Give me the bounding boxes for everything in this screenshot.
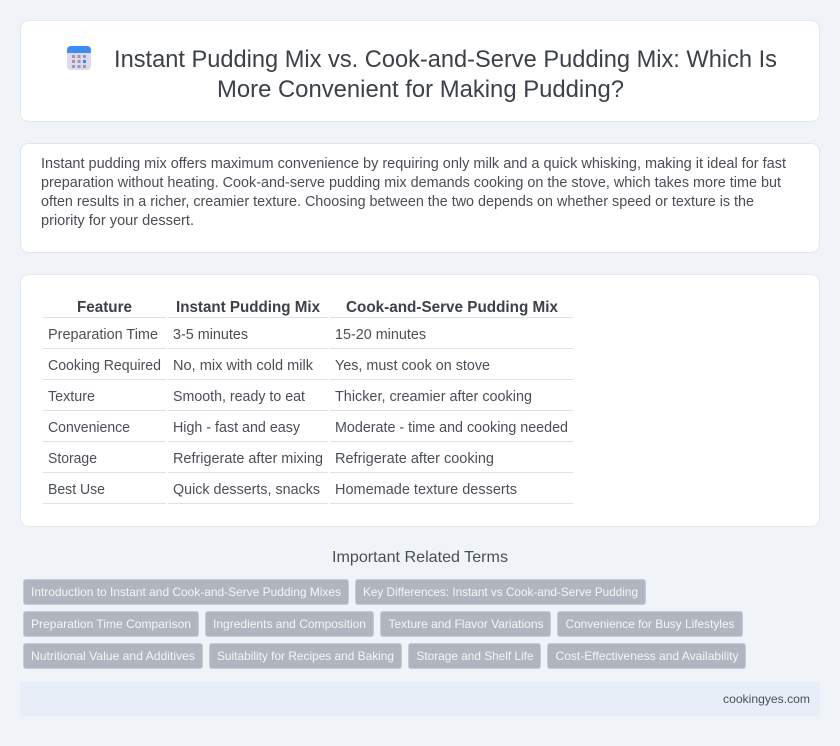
tag bbox=[380, 612, 550, 636]
tag bbox=[356, 580, 646, 604]
footer credit: cookingyes.com bbox=[723, 692, 810, 706]
tag: Key Differences: Instant vs Cook-and-Serve Pudding bbox=[363, 585, 638, 599]
row: texture: Smooth, ready to eat bbox=[173, 389, 305, 405]
row: storage: Refrigerate after mixing bbox=[173, 451, 323, 467]
row: best use: Homemade texture desserts bbox=[335, 482, 517, 498]
row: storage bbox=[48, 451, 494, 467]
title: More Convenient for Making Pudding? bbox=[217, 76, 624, 103]
row: cooking required bbox=[48, 358, 490, 374]
intro text: priority for your dessert. bbox=[41, 213, 194, 229]
row: texture: Texture bbox=[48, 389, 95, 405]
table rules bbox=[43, 317, 573, 504]
tag bbox=[558, 612, 742, 636]
row: cooking required: Yes, must cook on stove bbox=[335, 358, 490, 374]
tag: Ingredients and Composition bbox=[213, 617, 366, 631]
intro text: preparation without heating. Cook-and-serve pudding mix demands cooking on the stove, which takes more time but bbox=[41, 175, 781, 191]
tag: Nutritional Value and Additives bbox=[31, 649, 195, 663]
table header row: Feature bbox=[77, 299, 132, 316]
row: best use: Quick desserts, snacks bbox=[173, 482, 320, 498]
icon: calendar bbox=[67, 46, 91, 70]
intro text: often results in a richer, creamier texture. Choosing between the two depends on whether speed or texture is the bbox=[41, 194, 754, 210]
tag: Texture and Flavor Variations bbox=[388, 617, 544, 631]
table header row bbox=[77, 299, 558, 316]
tag: Cost-Effectiveness and Availability bbox=[556, 649, 738, 663]
title: Instant Pudding Mix vs. Cook-and-Serve Pudding Mix: Which Is bbox=[114, 46, 777, 73]
tag bbox=[408, 644, 540, 668]
row: texture bbox=[48, 389, 532, 405]
panel: comparison table bbox=[20, 274, 820, 526]
row: preparation time bbox=[48, 327, 426, 343]
tag bbox=[24, 644, 202, 668]
row: convenience: Convenience bbox=[48, 420, 130, 436]
row: texture: Thicker, creamier after cooking bbox=[335, 389, 532, 405]
row: storage: Storage bbox=[48, 451, 97, 467]
row: cooking required: No, mix with cold milk bbox=[173, 358, 314, 374]
footer bar bbox=[20, 682, 820, 716]
tags: related terms bbox=[24, 580, 746, 668]
row: convenience bbox=[48, 420, 568, 436]
tag: Convenience for Busy Lifestyles bbox=[566, 617, 734, 631]
table header row: Instant Pudding Mix bbox=[176, 299, 320, 316]
panel: header bbox=[20, 20, 820, 122]
row: preparation time: Preparation Time bbox=[48, 327, 158, 343]
panel: introduction bbox=[20, 144, 820, 252]
tag bbox=[548, 644, 746, 668]
row: best use: Best Use bbox=[48, 482, 105, 498]
tag: Preparation Time Comparison bbox=[31, 617, 191, 631]
tag bbox=[210, 644, 402, 668]
tag: Suitability for Recipes and Baking bbox=[217, 649, 394, 663]
row: convenience: High - fast and easy bbox=[173, 420, 301, 436]
title bbox=[114, 46, 777, 103]
heading: related terms: Important Related Terms bbox=[332, 549, 508, 566]
tag bbox=[24, 612, 198, 636]
tag: Introduction to Instant and Cook-and-Serve Pudding Mixes bbox=[31, 585, 341, 599]
intro text bbox=[41, 156, 786, 229]
tag: Storage and Shelf Life bbox=[416, 649, 534, 663]
table header row: Cook-and-Serve Pudding Mix bbox=[346, 299, 558, 316]
tag bbox=[24, 580, 348, 604]
row: cooking required: Cooking Required bbox=[48, 358, 161, 374]
row: best use bbox=[48, 482, 517, 498]
row: preparation time: 15-20 minutes bbox=[335, 327, 426, 343]
intro text: Instant pudding mix offers maximum convenience by requiring only milk and a quick whisking, making it ideal for fast bbox=[41, 156, 786, 172]
tag bbox=[206, 612, 374, 636]
row: storage: Refrigerate after cooking bbox=[335, 451, 494, 467]
row: convenience: Moderate - time and cooking needed bbox=[335, 420, 568, 436]
row: preparation time: 3-5 minutes bbox=[173, 327, 248, 343]
